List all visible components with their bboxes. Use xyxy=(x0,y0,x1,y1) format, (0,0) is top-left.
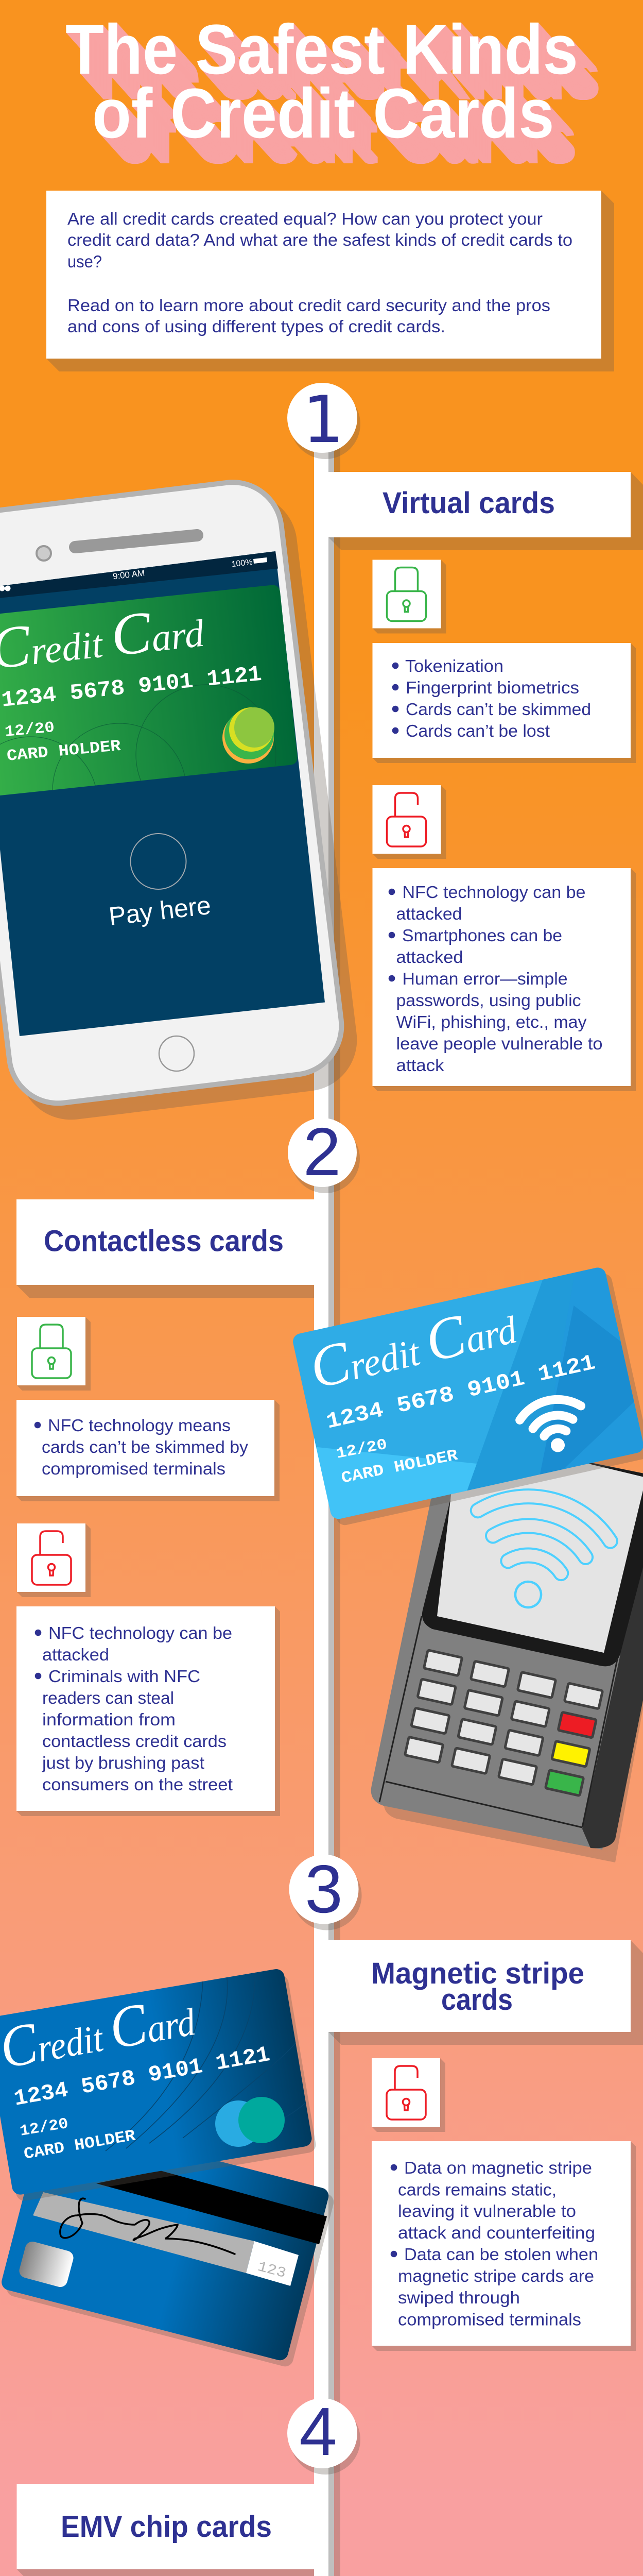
cons list: virtual cards: attacked xyxy=(396,947,463,967)
dark blue credit card front: 1234 5678 9101 1121 xyxy=(12,2042,272,2112)
pros list: virtual cards: Fingerprint biometrics xyxy=(406,678,579,697)
intro panel: and cons of using different types of credit cards. xyxy=(67,317,445,336)
green credit card on phone: CARD HOLDER xyxy=(6,737,121,766)
vertical timeline line xyxy=(314,443,340,2576)
payment terminal xyxy=(371,1432,643,1862)
card logo xyxy=(215,2097,285,2147)
intro panel: credit card data? And what are the safest kinds of credit cards to xyxy=(67,230,572,249)
cons list: contactless: Criminals with NFC xyxy=(48,1667,200,1686)
cons list: contactless: NFC technology can be xyxy=(48,1623,232,1642)
dark blue credit card front: CARD HOLDER xyxy=(23,2127,137,2164)
number badge 4 xyxy=(287,2394,360,2475)
section 1 heading: Virtual cards xyxy=(328,472,643,550)
cons list: contactless: information from xyxy=(42,1710,176,1729)
white wifi icon xyxy=(517,1394,589,1455)
blue contactless credit card: CARD HOLDER xyxy=(340,1447,460,1488)
section 2 heading: Contactless cards: Contactless cards xyxy=(44,1224,284,1258)
pros list: contactless: NFC technology means xyxy=(48,1416,231,1435)
section 1 heading: Virtual cards: Virtual cards xyxy=(383,486,555,520)
section 2 heading: Contactless cards xyxy=(16,1199,314,1298)
phone screen xyxy=(0,551,325,1036)
section 3 heading: Magnetic stripe cards: cards xyxy=(441,1983,513,2016)
back chip xyxy=(18,2240,75,2289)
cons list: virtual cards: Human error—simple xyxy=(403,969,567,988)
blue contactless credit card: Credit Card xyxy=(304,1290,522,1401)
phone camera xyxy=(37,546,51,561)
cons list: contactless xyxy=(16,1606,280,1816)
cons list: virtual cards: attacked xyxy=(396,904,462,923)
section 4 heading: EMV chip cards xyxy=(16,2484,314,2576)
blue card back: 123 xyxy=(256,2259,288,2282)
cons list: virtual cards xyxy=(373,868,636,1091)
signature xyxy=(60,2198,235,2254)
intro panel: use? xyxy=(67,252,102,271)
number badge 1: 1 xyxy=(303,382,344,457)
blue card back xyxy=(0,2116,336,2368)
pros list: virtual cards: Cards can’t be skimmed xyxy=(406,700,591,719)
cons list: magnetic stripe xyxy=(372,2141,636,2351)
icon: red open lock, virtual cards xyxy=(373,785,446,859)
intro panel: Read on to learn more about credit card security and the pros xyxy=(67,296,550,315)
phone screen: 100% xyxy=(231,558,253,569)
icon: green lock, contactless xyxy=(17,1317,91,1391)
section 4 heading: EMV chip cards: EMV chip cards xyxy=(61,2510,272,2544)
pros list: contactless: compromised terminals xyxy=(42,1459,225,1478)
section 3 heading: Magnetic stripe cards xyxy=(328,1940,643,2045)
pros list: contactless: cards can’t be skimmed by xyxy=(42,1437,249,1456)
magnetic stripe xyxy=(96,2171,327,2244)
intro panel xyxy=(46,191,614,371)
cons list: magnetic stripe: Data on magnetic stripe xyxy=(404,2158,592,2177)
section 3 heading: Magnetic stripe cards: Magnetic stripe xyxy=(371,1957,584,1990)
terminal wifi outline icon xyxy=(459,1484,616,1622)
phone screen: 9:00 AM xyxy=(112,568,145,581)
cons list: magnetic stripe: leaving it vulnerable to xyxy=(398,2201,576,2221)
cons list: contactless: readers can steal xyxy=(42,1688,174,1707)
cons list: virtual cards: leave people vulnerable to xyxy=(396,1034,602,1053)
terminal keypad xyxy=(405,1650,603,1795)
cons list: magnetic stripe: magnetic stripe cards are xyxy=(398,2266,594,2285)
blue contactless credit card xyxy=(291,1266,643,1527)
pros list: contactless xyxy=(16,1400,280,1501)
phone speaker xyxy=(75,535,197,547)
icon: green lock, virtual cards xyxy=(373,560,446,634)
cons list: contactless: consumers on the street xyxy=(42,1775,233,1794)
blue contactless credit card: 1234 5678 9101 1121 xyxy=(324,1350,598,1435)
intro panel: Are all credit cards created equal? How can you protect your xyxy=(67,209,543,228)
title: of Credit Cards xyxy=(92,74,554,153)
green credit card on phone xyxy=(0,585,298,795)
title xyxy=(65,10,599,164)
cons list: virtual cards: Smartphones can be xyxy=(402,926,562,945)
dark blue credit card front xyxy=(0,1968,317,2202)
cons list: virtual cards: NFC technology can be xyxy=(403,883,586,902)
number badge 3 xyxy=(289,1851,361,1930)
cons list: virtual cards: attack xyxy=(396,1056,444,1075)
number badge 3: 3 xyxy=(305,1851,343,1927)
cons list: contactless: contactless credit cards xyxy=(42,1732,227,1751)
cons list: magnetic stripe: cards remains static, xyxy=(398,2180,557,2199)
green credit card on phone: 1234 5678 9101 1121 xyxy=(0,662,263,713)
pros list: virtual cards: Tokenization xyxy=(405,656,503,675)
cons list: contactless: just by brushing past xyxy=(42,1753,204,1772)
pros list: virtual cards xyxy=(373,643,636,763)
phone illustration xyxy=(0,474,363,1126)
blue contactless credit card: 12/20 xyxy=(335,1436,389,1463)
phone home button xyxy=(159,1036,194,1071)
number badge 1 xyxy=(287,382,360,459)
signature strip xyxy=(33,2192,254,2273)
cons list: virtual cards: WiFi, phishing, etc., may xyxy=(396,1012,587,1031)
cons list: magnetic stripe: compromised terminals xyxy=(398,2310,581,2329)
phone screen: Pay here xyxy=(107,891,212,931)
cons list: magnetic stripe: attack and counterfeiting xyxy=(398,2223,595,2242)
pros list: virtual cards: Cards can’t be lost xyxy=(406,721,550,740)
number badge 4: 4 xyxy=(299,2394,337,2469)
dark blue credit card front: Credit Card xyxy=(0,1982,199,2081)
cons list: magnetic stripe: Data can be stolen when xyxy=(404,2245,598,2264)
cons list: contactless: attacked xyxy=(42,1645,109,1664)
title: The Safest Kinds xyxy=(65,10,578,89)
cons list: magnetic stripe: swiped through xyxy=(398,2288,520,2307)
dark blue credit card front: 12/20 xyxy=(19,2115,69,2141)
green credit card on phone: 12/20 xyxy=(4,719,56,741)
icon: red open lock, contactless xyxy=(17,1523,91,1597)
icon: red open lock, magnetic stripe xyxy=(372,2058,445,2132)
cons list: virtual cards: passwords, using public xyxy=(396,991,581,1010)
card logo xyxy=(222,707,274,764)
number badge 2: 2 xyxy=(303,1114,341,1190)
number badge 2 xyxy=(288,1114,360,1193)
